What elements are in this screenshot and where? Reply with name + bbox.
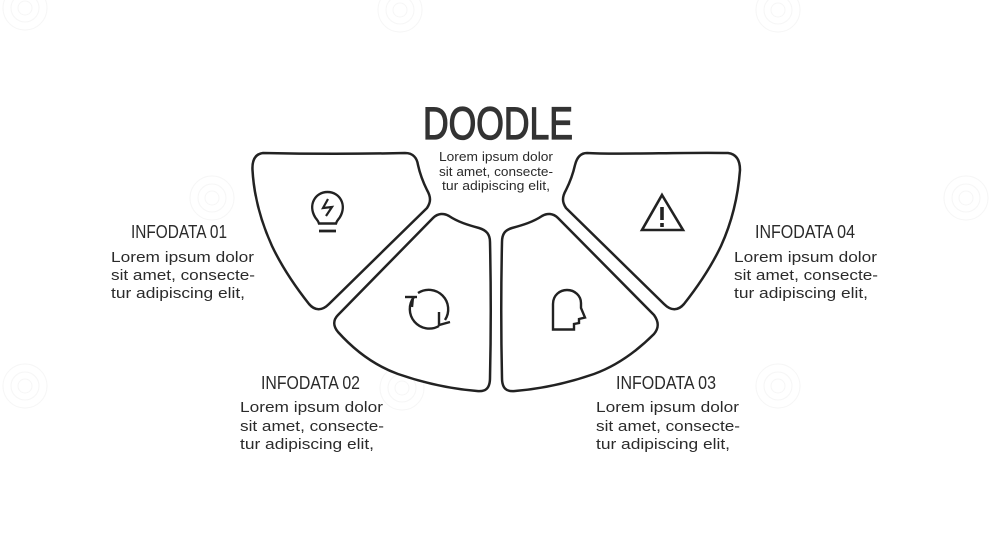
panel: segment 03: [501, 214, 658, 391]
text block: infodata 03: Lorem ipsum dolor: [596, 399, 739, 416]
text block: infodata 04: tur adipiscing elit,: [734, 285, 868, 302]
text block: center description: [439, 150, 553, 193]
text block: infodata 02: tur adipiscing elit,: [240, 436, 374, 453]
text block: center description: Lorem ipsum dolor: [439, 150, 553, 164]
text block: infodata 01: tur adipiscing elit,: [111, 285, 245, 302]
text block: infodata 03: tur adipiscing elit,: [596, 436, 730, 453]
text block: infodata 03: INFODATA 03: [616, 373, 716, 393]
text block: center description: tur adipiscing elit,: [442, 179, 550, 193]
icon: warning triangle: [642, 195, 683, 230]
text block: infodata 01: [111, 222, 255, 302]
panel: segment 04: [563, 153, 740, 309]
text block: infodata 03: [596, 373, 740, 453]
icon: cycle arrows: [405, 290, 450, 329]
icon: head profile: [553, 290, 585, 330]
text block: infodata 01: Lorem ipsum dolor: [111, 249, 254, 266]
text block: infodata 02: [240, 373, 384, 453]
text block: infodata 04: INFODATA 04: [755, 222, 855, 242]
text block: infodata 04: sit amet, consecte-: [734, 267, 878, 284]
text block: infodata 02: Lorem ipsum dolor: [240, 399, 383, 416]
panel: segment 02: [334, 214, 491, 391]
title: DOODLE: [423, 98, 573, 149]
text block: infodata 02: INFODATA 02: [261, 373, 360, 393]
panel: segment 01: [252, 153, 430, 309]
text block: infodata 04: Lorem ipsum dolor: [734, 249, 877, 266]
text block: center description: sit amet, consecte-: [439, 165, 553, 179]
text block: infodata 04: [734, 222, 878, 302]
text block: infodata 01: INFODATA 01: [131, 222, 227, 242]
icon: light bulb: [312, 192, 343, 231]
text block: infodata 03: sit amet, consecte-: [596, 418, 740, 435]
text block: infodata 01: sit amet, consecte-: [111, 267, 255, 284]
text block: infodata 02: sit amet, consecte-: [240, 418, 384, 435]
